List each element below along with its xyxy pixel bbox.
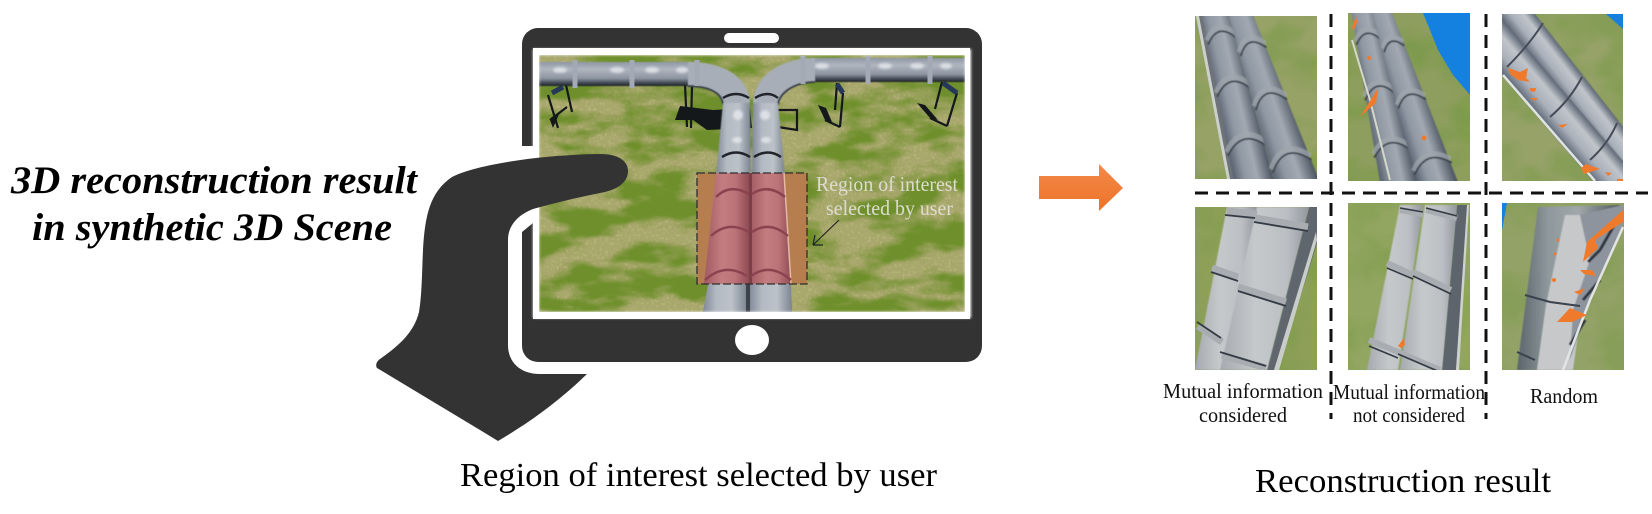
gap in tablet edge behind the hand [515,146,533,232]
icon: speaker slot [724,33,779,43]
panel labels: Random [1530,384,1598,408]
caption: Reconstruction result: Reconstruction result [1255,463,1552,500]
scene annotation text: Region of interest [816,172,958,196]
blue background hole [1423,13,1470,95]
pipe rings [575,56,930,88]
tablet device with 3D scene [515,28,982,362]
panel labels [1163,379,1598,427]
dashed divider grid [1195,14,1648,419]
left pipe [535,62,751,175]
panel: mutual information considered, side view [1195,207,1317,370]
title: 3D reconstruction result in synthetic 3D Scene: in synthetic 3D Scene [32,206,392,249]
pipe highlights [553,63,952,143]
soft white vignette edge [536,52,968,315]
synthetic 3D scene [535,55,970,312]
icon: home button [735,325,769,355]
panel: random, top view [1502,14,1623,181]
panel labels: not considered [1353,403,1465,427]
right pipe [752,58,970,175]
scene annotation text [816,172,958,220]
panel labels: considered [1199,403,1287,427]
shadows and supports [548,82,957,130]
panel: mutual information not considered, top view [1348,13,1470,181]
panel: mutual information not considered, side view [1348,203,1470,372]
panel: random, side view [1502,203,1624,370]
panel: mutual information considered, top view [1195,16,1317,179]
tablet screen frame [533,48,970,319]
lower pipe end [703,284,747,312]
tablet body [522,28,982,362]
title: 3D reconstruction result in synthetic 3D Scene: 3D reconstruction result [10,159,418,202]
title: 3D reconstruction result in synthetic 3D Scene [10,159,418,249]
caption: Region of interest selected by user: Region of interest selected by user [460,457,938,494]
scene annotation text: selected by user [826,196,953,220]
arrow: orange flow arrow [1039,164,1123,211]
arrow: annotation pointer [813,220,839,245]
icon: hand holding tablet [376,154,628,441]
panel labels: Mutual information [1163,379,1323,403]
region of interest overlay [697,173,807,284]
panel labels: Mutual information [1333,380,1485,404]
